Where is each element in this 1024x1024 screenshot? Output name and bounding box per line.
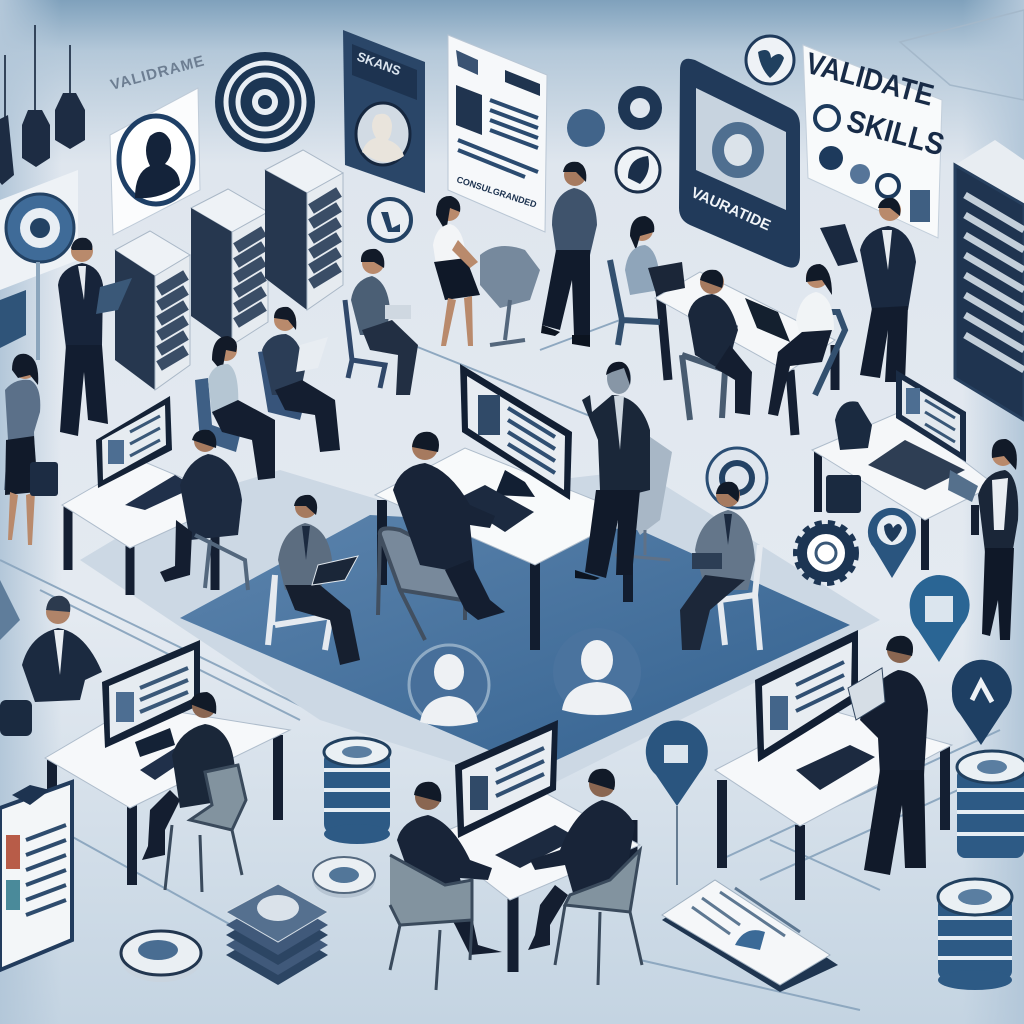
person: right man — [528, 769, 642, 985]
large screen panel — [679, 59, 800, 268]
keyboard — [868, 440, 965, 490]
person: standing man — [848, 636, 928, 875]
person: seated woman with light top — [195, 336, 275, 480]
person: standing woman left — [4, 354, 58, 545]
person: seated man by server — [345, 249, 418, 395]
monitor — [102, 640, 200, 748]
center left disk — [313, 857, 375, 898]
server rack right — [955, 140, 1024, 420]
stacked layers icon — [226, 884, 328, 985]
center desk group — [375, 362, 672, 650]
person: standing man with tablet — [58, 238, 132, 436]
monitor — [755, 630, 858, 762]
icon: blue emblem — [567, 109, 605, 147]
server rack 3 — [265, 150, 343, 310]
lower left seated man — [0, 580, 102, 736]
radar badge — [707, 448, 767, 508]
left target wall icon — [0, 170, 78, 360]
center monitor — [460, 364, 572, 500]
icon: leaf badge — [616, 148, 660, 192]
office chair — [165, 765, 246, 892]
profile card — [110, 88, 200, 235]
person: woman at table left — [610, 216, 685, 345]
keyboard — [455, 485, 534, 532]
person: standing man with clipboard — [820, 198, 916, 382]
screen label: VAURATIDE — [688, 184, 773, 234]
sign sub heading: SKILLS — [843, 104, 948, 163]
person: seated man from behind — [378, 432, 505, 640]
monitor — [96, 396, 172, 488]
hanging lamps — [0, 25, 85, 185]
person: seated man with document — [258, 307, 340, 452]
laptop — [745, 298, 790, 342]
person: man at table from behind — [682, 270, 752, 420]
bottom right report — [662, 880, 838, 992]
avatar left — [409, 645, 489, 725]
top right meeting table — [610, 216, 845, 435]
person: masked man standing — [575, 362, 672, 580]
location pin icons — [646, 508, 1012, 885]
pin heart — [868, 508, 916, 578]
skills panel — [343, 30, 425, 193]
database stack center — [324, 738, 390, 844]
skills heading: SKANS — [355, 49, 403, 78]
keyboard — [796, 745, 875, 790]
skills portrait — [356, 103, 410, 165]
person: left man — [390, 782, 502, 990]
document poster — [448, 35, 547, 232]
icon: phone badge — [369, 199, 411, 241]
right desk with laptop — [812, 370, 995, 570]
icon: heart badge — [746, 36, 794, 84]
person: standing man in grey jacket — [541, 162, 597, 347]
bag on desk — [835, 401, 872, 450]
server rack 2 — [191, 189, 268, 345]
database stack right upper — [957, 751, 1024, 858]
keyboard — [125, 475, 195, 510]
left desk group — [62, 396, 248, 595]
person: woman at table right — [768, 264, 845, 416]
lower left desk group — [45, 640, 290, 892]
person: man typing — [160, 430, 248, 590]
small round icons — [369, 36, 794, 241]
icon: gear badge — [618, 86, 662, 130]
person: sitting woman in white top — [433, 196, 480, 346]
monitor — [896, 370, 966, 462]
target icon — [215, 52, 315, 152]
server rack 1 — [115, 231, 190, 390]
bottom left disk — [121, 931, 201, 982]
wall panel top right — [900, 10, 1024, 100]
pin book — [646, 720, 708, 806]
lower right desk group — [715, 630, 952, 900]
person: seated man in grey right — [680, 482, 760, 650]
avatar badges — [409, 628, 641, 726]
bottom centre desk group — [390, 720, 642, 990]
keyboard — [495, 825, 578, 868]
gear icon — [796, 523, 856, 583]
blue floor rug — [180, 515, 850, 770]
sign heading: VALIDATE — [802, 47, 937, 113]
poster caption: CONSULGRANDED — [455, 174, 538, 210]
person: man at desk — [142, 692, 235, 860]
monitor — [455, 720, 558, 838]
lower left clipboard — [0, 782, 72, 970]
pin network — [952, 660, 1012, 745]
profile ring — [119, 116, 193, 204]
grey robot chair — [480, 246, 540, 345]
person: right standing woman — [948, 439, 1018, 640]
validate skills sign — [802, 45, 948, 238]
person: seated man in grey with laptop — [268, 495, 360, 665]
pin chart — [910, 575, 970, 662]
profile silhouette — [135, 132, 180, 198]
small wall label: VALIDRAME — [109, 52, 207, 94]
avatar right — [553, 628, 641, 716]
database stack right lower — [938, 879, 1012, 990]
